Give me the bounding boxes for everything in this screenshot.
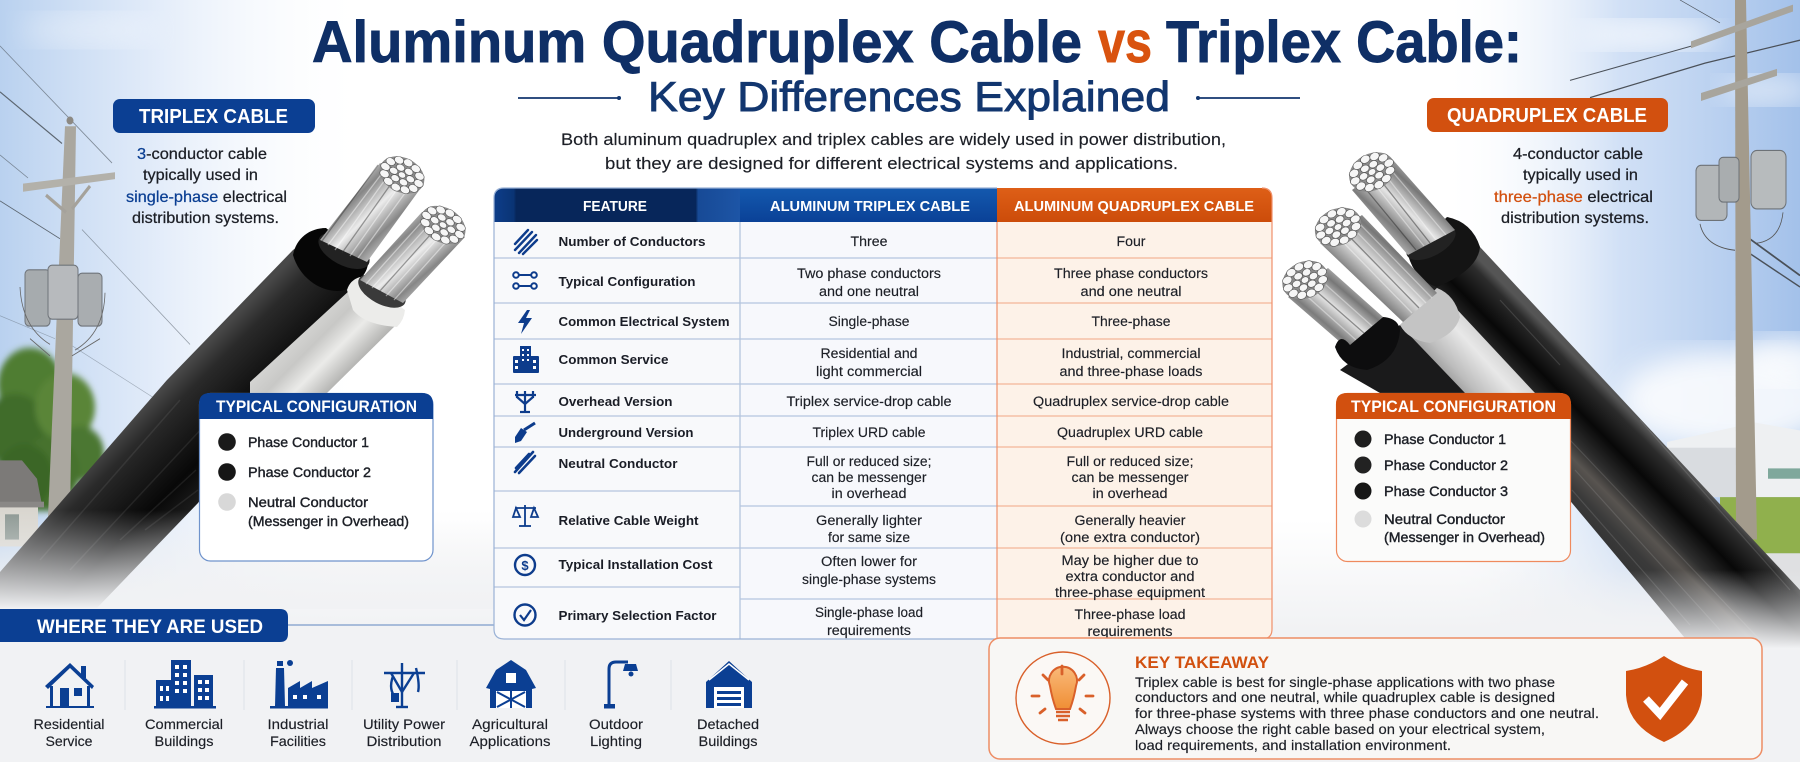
triplex column values: and one neutral	[819, 284, 919, 299]
quadruplex column values: Quadruplex URD cable	[1057, 425, 1203, 440]
table outlines	[494, 188, 997, 639]
panel: key takeaway	[989, 638, 1762, 759]
cable image: triplex cable	[0, 149, 472, 608]
panel: typical configuration triplex: TYPICAL CONFIGURATION	[216, 397, 417, 416]
strands 1	[1352, 160, 1455, 255]
panel: typical configuration triplex: Neutral Conductor	[248, 494, 368, 510]
table header text: ALUMINUM TRIPLEX CABLE	[770, 198, 970, 215]
icon: dollar: $	[521, 558, 529, 573]
feature column labels: Common Service	[558, 352, 668, 367]
triplex column values: Single-phase load	[815, 605, 923, 620]
label: quadruplex cable: QUADRUPLEX CABLE	[1447, 105, 1647, 127]
usage: commercial buildings: Commercial	[145, 716, 223, 732]
panel: typical configuration quadruplex: (Messenger in Overhead)	[1384, 529, 1545, 545]
quadruplex column values: (one extra conductor)	[1060, 530, 1200, 545]
quadruplex column values: can be messenger	[1072, 470, 1189, 485]
icon: shield check	[1626, 656, 1702, 742]
triplex column values: Full or reduced size;	[806, 454, 932, 469]
triplex description: distribution systems.	[132, 210, 279, 227]
label: triplex cable: TRIPLEX CABLE	[139, 106, 288, 128]
usage: utility power distribution: Utility Power	[363, 716, 445, 732]
quadruplex description: three-phase electrical	[1494, 189, 1653, 206]
icon: lightning bolt	[518, 310, 532, 334]
strands 2	[1320, 215, 1437, 322]
panel: key takeaway: Triplex cable is best for single-phase applications with two phase	[1135, 674, 1555, 690]
table header text: FEATURE	[583, 198, 647, 215]
triplex description	[126, 146, 287, 227]
jacket opening 2	[353, 267, 411, 315]
cable image: quadruplex cable	[1276, 145, 1800, 680]
connector line to table	[288, 624, 500, 626]
panel: typical configuration triplex: (Messenger in Overhead)	[248, 513, 409, 529]
icon: conductors	[515, 230, 537, 254]
white neutral conductor body	[250, 290, 403, 393]
usage: outdoor lighting: Outdoor	[589, 716, 643, 732]
label: triplex cable	[113, 99, 315, 133]
feature column labels: Overhead Version	[558, 394, 673, 409]
table header text	[583, 198, 1254, 215]
quadruplex column values: and one neutral	[1080, 284, 1182, 299]
triplex column values: single-phase systems	[802, 572, 936, 587]
bottom fade right	[1500, 570, 1800, 682]
wires	[1570, 0, 1800, 287]
usage: outdoor lighting: Lighting	[590, 733, 642, 749]
icon: utility pole	[515, 391, 536, 412]
feature column labels: Underground Version	[558, 425, 694, 440]
triplex column values: Triplex URD cable	[812, 425, 926, 440]
quadruplex description: 4-conductor cable	[1513, 146, 1643, 163]
wires	[0, 46, 190, 402]
title	[312, 10, 1522, 75]
feature column labels: Typical Installation Cost	[558, 557, 713, 572]
cable tip 2	[414, 198, 472, 252]
table header text: ALUMINUM QUADRUPLEX CABLE	[1014, 198, 1254, 215]
lower jacket	[1335, 317, 1400, 370]
triplex column values: Single-phase	[828, 314, 910, 329]
subtitle: Key Differences Explained	[648, 73, 1170, 120]
quadruplex column values: Three-phase load	[1074, 607, 1186, 622]
quadruplex description: distribution systems.	[1501, 210, 1649, 227]
quadruplex column values: May be higher due to	[1062, 553, 1198, 568]
triplex column values: Triplex service-drop cable	[786, 394, 952, 409]
quadruplex column values: requirements	[1088, 624, 1173, 639]
intro text: Both aluminum quadruplex and triplex cables are widely used in power distribution,	[561, 130, 1226, 149]
icon: dollar	[515, 555, 535, 575]
panel: typical configuration triplex	[199, 393, 433, 561]
subtitle rules	[518, 96, 1300, 100]
usage: detached buildings	[697, 661, 759, 749]
triplex column values: Often lower for	[821, 554, 918, 569]
triplex column values: can be messenger	[812, 470, 927, 485]
triplex column values	[786, 234, 952, 638]
main black conductor	[1400, 217, 1800, 680]
panel: typical configuration quadruplex	[1336, 393, 1571, 562]
usage: industrial facilities	[268, 660, 328, 749]
triplex column values: Generally lighter	[816, 513, 923, 528]
intro text: but they are designed for different electrical systems and applications.	[605, 154, 1178, 173]
usage: detached buildings: Detached	[697, 716, 759, 732]
triplex column values: Two phase conductors	[797, 266, 941, 281]
panel: typical configuration quadruplex: Phase Conductor 1	[1384, 431, 1506, 447]
feature column labels: Typical Configuration	[558, 274, 696, 289]
quadruplex description	[1494, 146, 1653, 227]
factory	[1667, 422, 1800, 497]
quadruplex column values: Full or reduced size;	[1066, 454, 1194, 469]
usage: industrial facilities: Facilities	[270, 733, 326, 749]
crossarm	[23, 172, 115, 192]
panel: key takeaway: load requirements, and installation environment.	[1135, 737, 1451, 753]
triplex column values: requirements	[827, 623, 911, 638]
usage: residential service	[34, 663, 104, 749]
white jacket	[1400, 288, 1460, 343]
title: Triplex Cable:	[1166, 10, 1522, 75]
panel: key takeaway: KEY TAKEAWAY	[1135, 653, 1270, 672]
comparison table	[494, 188, 1272, 639]
feature column labels: Common Electrical System	[558, 314, 730, 329]
triplex description: single-phase electrical	[126, 189, 287, 206]
panel: key takeaway: conductors and one neutral, while quadruplex cable is designed	[1135, 689, 1555, 705]
tip 3	[1276, 254, 1334, 306]
title: vs	[1098, 10, 1152, 75]
strand group 2	[360, 212, 465, 303]
triplex column values: for same size	[828, 530, 910, 545]
main jacket	[1408, 217, 1480, 287]
icon: underground	[515, 423, 535, 443]
icon: light bulb	[1016, 652, 1110, 744]
feature column labels: Number of Conductors	[558, 234, 706, 249]
section header: where they are used	[0, 609, 288, 642]
icon: configuration	[513, 272, 537, 289]
grass	[1720, 497, 1800, 553]
usage: detached buildings: Buildings	[698, 733, 758, 749]
black jacket end	[293, 228, 368, 291]
usage: outdoor lighting	[589, 662, 643, 749]
quadruplex column values	[1033, 234, 1229, 639]
label: quadruplex cable	[1427, 98, 1668, 132]
usage: commercial buildings	[145, 660, 223, 749]
quadruplex column values: Industrial, commercial	[1062, 346, 1200, 361]
pole	[1735, 0, 1757, 540]
panel: key takeaway: Always choose the right cable based on your electrical system,	[1135, 721, 1545, 737]
triplex column values: in overhead	[832, 486, 906, 501]
photo: right utility pole, factory and grass	[1570, 0, 1800, 611]
quadruplex column values: Quadruplex service-drop cable	[1033, 394, 1229, 409]
feature column labels	[558, 234, 730, 623]
panel: typical configuration triplex: Phase Conductor 1	[248, 434, 369, 450]
triplex description: 3-conductor cable	[137, 146, 267, 163]
feature column labels: Neutral Conductor	[558, 456, 678, 471]
quadruplex description: typically used in	[1523, 167, 1638, 184]
usage: utility power distribution: Distribution	[366, 733, 442, 749]
photo: left utility pole with transformers, tree and house	[0, 46, 190, 546]
quadruplex column values: Four	[1116, 234, 1146, 249]
icon: check	[514, 604, 536, 626]
crossarms	[1691, 5, 1793, 48]
table fills	[494, 188, 1272, 639]
quadruplex column values: in overhead	[1092, 486, 1168, 501]
triplex description: typically used in	[143, 167, 258, 184]
triplex column values: Residential and	[820, 346, 918, 361]
pole	[48, 126, 76, 517]
panel: typical configuration quadruplex: Phase Conductor 2	[1384, 457, 1508, 473]
quadruplex column values: Three-phase	[1092, 314, 1170, 329]
transformers	[25, 265, 102, 326]
tip 2	[1309, 200, 1367, 254]
quadruplex column values: Three phase conductors	[1054, 266, 1208, 281]
icon: buildings	[513, 346, 539, 373]
usage separators	[125, 660, 671, 710]
lower black conductor	[1340, 325, 1500, 393]
panel: typical configuration quadruplex: Neutral Conductor	[1384, 511, 1505, 527]
white conductor	[1400, 288, 1535, 393]
title: Aluminum Quadruplex Cable	[312, 10, 1082, 75]
usage: industrial facilities: Industrial	[268, 716, 328, 732]
strands 3	[1288, 268, 1383, 348]
transformers	[1696, 150, 1786, 220]
usage: agricultural applications: Agricultural	[472, 716, 548, 732]
usage: agricultural applications	[470, 660, 550, 749]
section header: where they are used: WHERE THEY ARE USED	[37, 617, 263, 638]
quadruplex column values: three-phase equipment	[1055, 585, 1205, 600]
quadruplex column values: Generally heavier	[1074, 513, 1186, 528]
jacket opening 1	[313, 225, 375, 277]
usage: residential service: Service	[46, 733, 93, 749]
white jacket end	[347, 277, 405, 327]
triplex column values: light commercial	[816, 364, 922, 379]
feature column labels: Relative Cable Weight	[558, 513, 699, 528]
quadruplex column values: and three-phase loads	[1060, 364, 1203, 379]
jacket opening main	[1401, 219, 1461, 267]
tip 1	[1342, 145, 1402, 199]
tree	[0, 348, 104, 511]
usage: utility power distribution	[363, 663, 445, 749]
panel: key takeaway: for three-phase systems with three phase conductors and one neutral.	[1135, 705, 1599, 721]
cable tip 1	[373, 149, 431, 201]
feature column labels: Primary Selection Factor	[558, 608, 716, 623]
usage: agricultural applications: Applications	[470, 733, 550, 749]
main body streaks	[1500, 300, 1790, 640]
intro text	[561, 130, 1226, 173]
house	[0, 460, 44, 546]
strand group 1	[320, 163, 423, 262]
black phase conductor body	[0, 228, 368, 608]
panel: typical configuration quadruplex: Phase Conductor 3	[1384, 483, 1508, 499]
usage: commercial buildings: Buildings	[154, 733, 214, 749]
triplex column values: Three	[850, 234, 888, 249]
icon: neutral conductor	[515, 452, 535, 473]
bottom fade left	[0, 510, 500, 609]
quadruplex column values: extra conductor and	[1066, 569, 1194, 584]
usage: residential service: Residential	[34, 716, 104, 732]
panel: typical configuration quadruplex: TYPICAL CONFIGURATION	[1351, 397, 1556, 416]
body streaks	[40, 400, 205, 570]
icon: scale	[513, 505, 538, 526]
panel: typical configuration triplex: Phase Conductor 2	[248, 464, 371, 480]
